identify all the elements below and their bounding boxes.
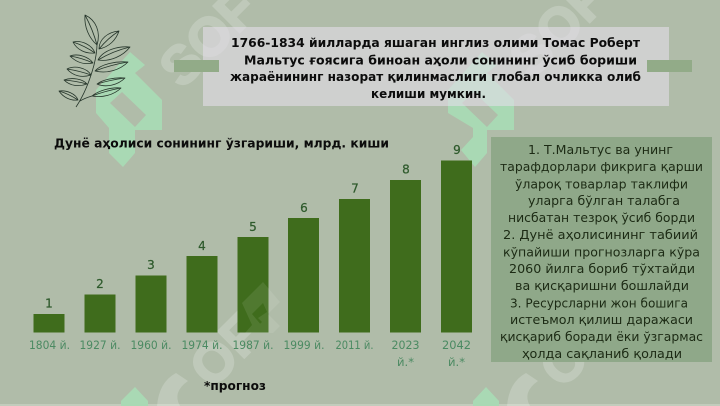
conclusions text: кўпайиши прогнозларга кўра	[503, 244, 700, 260]
year labels: 2042	[442, 338, 471, 352]
footnote: *прогноз	[204, 378, 266, 393]
value labels	[45, 143, 461, 310]
conclusions text: қисқариб боради ёки ўзгармас	[500, 329, 703, 344]
value labels: 5	[249, 220, 257, 234]
quote text: келиши мумкин.	[371, 86, 486, 101]
conclusions text: 2060 йилга бориб тўхтайди	[509, 261, 695, 276]
conclusions text	[500, 142, 703, 361]
value labels: 2	[96, 277, 104, 291]
value labels: 4	[198, 239, 206, 253]
conclusions text: ўлароқ товарлар таклифи	[515, 176, 688, 192]
year labels: 1960 й.	[130, 338, 172, 352]
bar chart	[29, 143, 472, 369]
watermark: logos and SOF text: OF	[528, 303, 624, 398]
decorative tape strips	[174, 60, 692, 72]
year labels: 1974 й.	[182, 338, 222, 352]
conclusions text: истеъмол қилиш даражаси	[510, 312, 693, 327]
panel: top quote	[203, 27, 669, 106]
conclusions text: 1. Т.Мальтус ва унинг	[528, 142, 673, 157]
conclusions text: уларга бўлган талабга	[528, 193, 680, 208]
watermark chevron over bar	[242, 282, 280, 333]
bars	[34, 160, 472, 332]
panel: conclusions	[491, 137, 712, 362]
quote text	[230, 35, 641, 101]
year labels: 2023	[392, 338, 420, 352]
watermark: logos and SOF text: OF	[178, 303, 274, 398]
value labels: 9	[453, 143, 461, 157]
year labels: й.*	[448, 355, 465, 369]
quote text: Мальтус ғоясига биноан аҳоли сонининг ўсиб бориши	[244, 52, 637, 68]
value labels: 1	[45, 296, 53, 310]
conclusions text: ҳолда сақланиб қолади	[522, 346, 682, 361]
conclusions text: 2. Дунё аҳолисининг табиий	[503, 227, 698, 242]
year labels: 1804 й.	[29, 338, 70, 352]
value labels: 6	[300, 201, 308, 215]
conclusions text: 3. Ресурсларни жон бошига	[510, 296, 688, 310]
icon: leaf branch	[59, 15, 130, 107]
quote text: жараёнининг назорат қилинмаслиги глобал очликка олиб	[230, 69, 641, 84]
year labels: 1927 й.	[80, 338, 120, 352]
watermark: logos and SOF text	[96, 0, 624, 406]
value labels: 7	[351, 182, 359, 196]
value labels: 8	[402, 162, 410, 176]
year labels: й.*	[397, 355, 414, 369]
conclusions text: нисбатан тезроқ ўсиб борди	[508, 210, 695, 225]
value labels: 3	[147, 258, 155, 272]
quote text: 1766-1834 йилларда яшаган инглиз олими Томас Роберт	[231, 35, 641, 50]
year labels: 1999 й.	[284, 338, 324, 352]
year labels: 1987 й.	[232, 338, 274, 352]
chart title: Дунё аҳолиси сонининг ўзгариши, млрд. киши	[54, 136, 389, 150]
conclusions text: тарафдорлари фикрига қарши	[500, 159, 703, 174]
year labels	[29, 338, 471, 369]
conclusions text: ва қисқаришни бошлайди	[515, 278, 689, 293]
year labels: 2011 й.	[336, 338, 374, 352]
